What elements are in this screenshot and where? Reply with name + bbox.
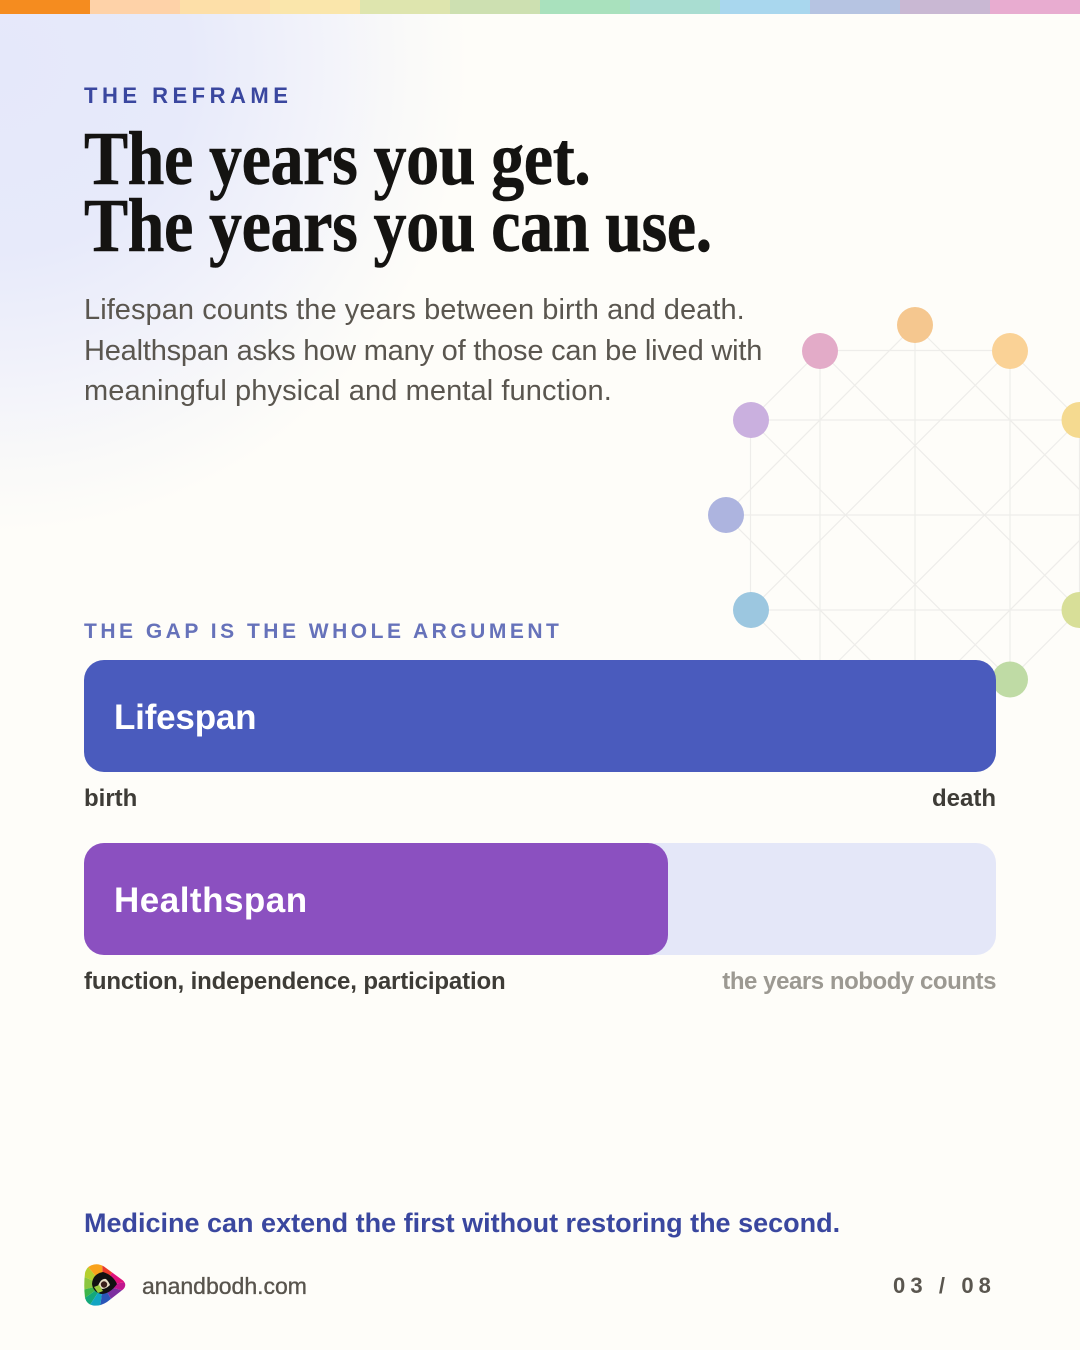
healthspan bar [84,843,668,955]
body text [84,294,762,407]
body text: Lifespan counts the years between birth and death. [84,294,745,326]
title: The years you get. [84,117,590,201]
rainbow strip [0,0,1080,14]
healthspan label: Healthspan [114,881,308,920]
title: The years you can use. [84,184,712,268]
section label: THE GAP IS THE WHOLE ARGUMENT [84,620,562,643]
takeaway: Medicine can extend the first without restoring the second. [84,1208,840,1238]
birth label: birth [84,785,137,812]
healthspan track [84,843,996,955]
title [84,117,712,268]
site url: anandbodh.com [142,1273,307,1299]
icon: logo [84,1264,126,1306]
page number: 03 / 08 [893,1273,996,1298]
gap caption: the years nobody counts [722,968,996,995]
eyebrow: THE REFRAME [84,83,292,108]
lifespan bar [84,660,996,772]
healthspan caption: function, independence, participation [84,968,506,995]
death label: death [932,785,996,812]
lifespan label: Lifespan [114,698,256,737]
body text: Healthspan asks how many of those can be lived with [84,334,762,366]
body text: meaningful physical and mental function. [84,375,612,407]
